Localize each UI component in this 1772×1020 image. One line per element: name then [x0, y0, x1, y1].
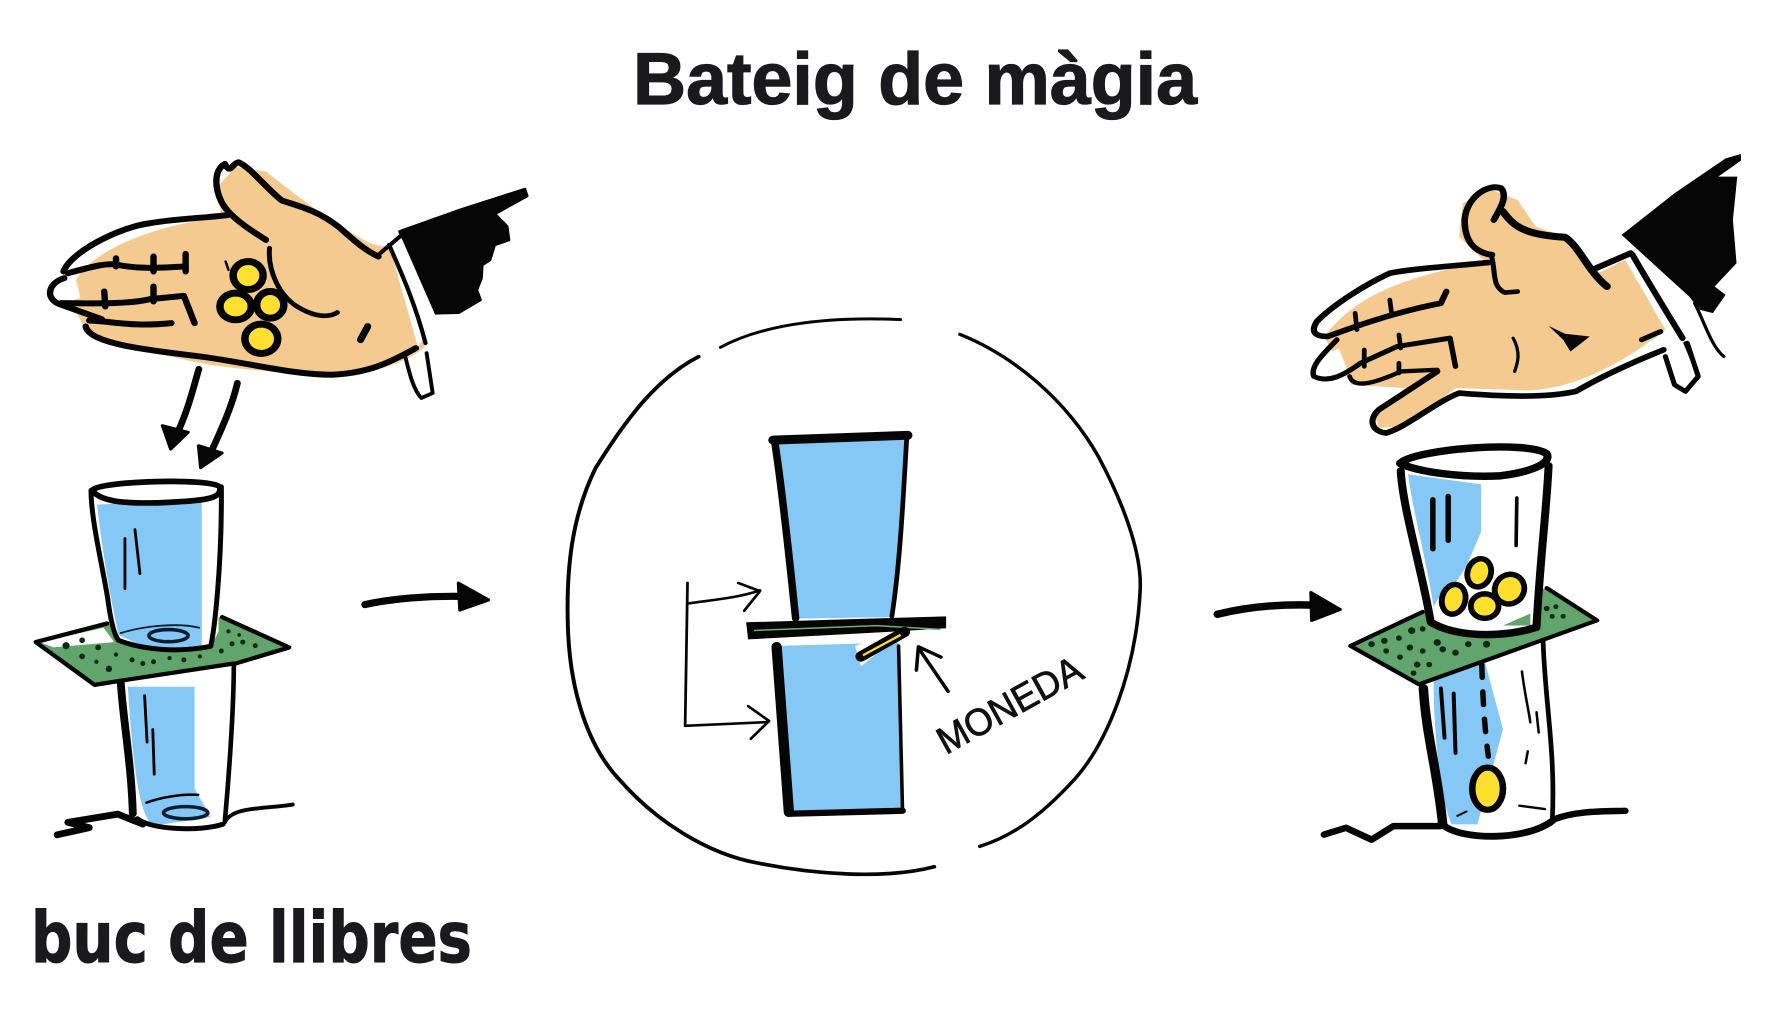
hand outline	[50, 162, 416, 375]
panel: cross-section detail circle	[568, 319, 1140, 874]
upper glass outline	[773, 435, 908, 618]
fingertip nail	[51, 278, 80, 303]
logo wordmark: buc de llibres	[31, 897, 472, 979]
palm crease mark	[1549, 326, 1590, 351]
falling coin	[1472, 768, 1503, 810]
jacket sleeve	[1622, 154, 1741, 313]
arrow to detail circle	[365, 583, 488, 610]
upper glass	[91, 481, 221, 650]
arrow down 1	[162, 369, 199, 449]
banknote card result	[1350, 588, 1597, 684]
ground line result	[1324, 811, 1625, 840]
lower glass	[121, 663, 234, 829]
shirt cuff	[380, 237, 437, 398]
hand drawn circle	[568, 319, 1140, 874]
coin under card	[855, 627, 908, 666]
banknote card	[36, 617, 289, 686]
coin pointer arrow	[916, 647, 948, 691]
label: moneda: MONEDA	[930, 648, 1091, 763]
upper glass section	[773, 435, 908, 619]
panel: glass stack with note	[36, 481, 488, 835]
arrow down 2	[198, 383, 237, 468]
fingertip	[1317, 348, 1348, 378]
lower glass result	[1423, 641, 1553, 836]
hand skin	[73, 167, 425, 376]
lower glass outline	[777, 646, 903, 814]
panel: hand dropping coins	[50, 162, 527, 468]
hand skin	[1324, 190, 1665, 428]
jacket sleeve	[400, 189, 527, 313]
upper glass result	[1400, 447, 1549, 635]
coins in glass	[1439, 556, 1529, 618]
panel: result glass stack with coins	[1218, 447, 1625, 840]
shirt cuff	[1633, 255, 1724, 391]
title: Bateig de màgia	[633, 37, 1198, 120]
bracket arrows	[685, 583, 769, 739]
card cross-section	[746, 616, 946, 639]
coins in palm	[220, 262, 284, 353]
ground line	[57, 805, 293, 835]
panel: open hand	[1313, 154, 1741, 433]
arrow to result	[1218, 593, 1340, 620]
hand outline	[1313, 187, 1664, 433]
lower glass section	[776, 642, 903, 813]
